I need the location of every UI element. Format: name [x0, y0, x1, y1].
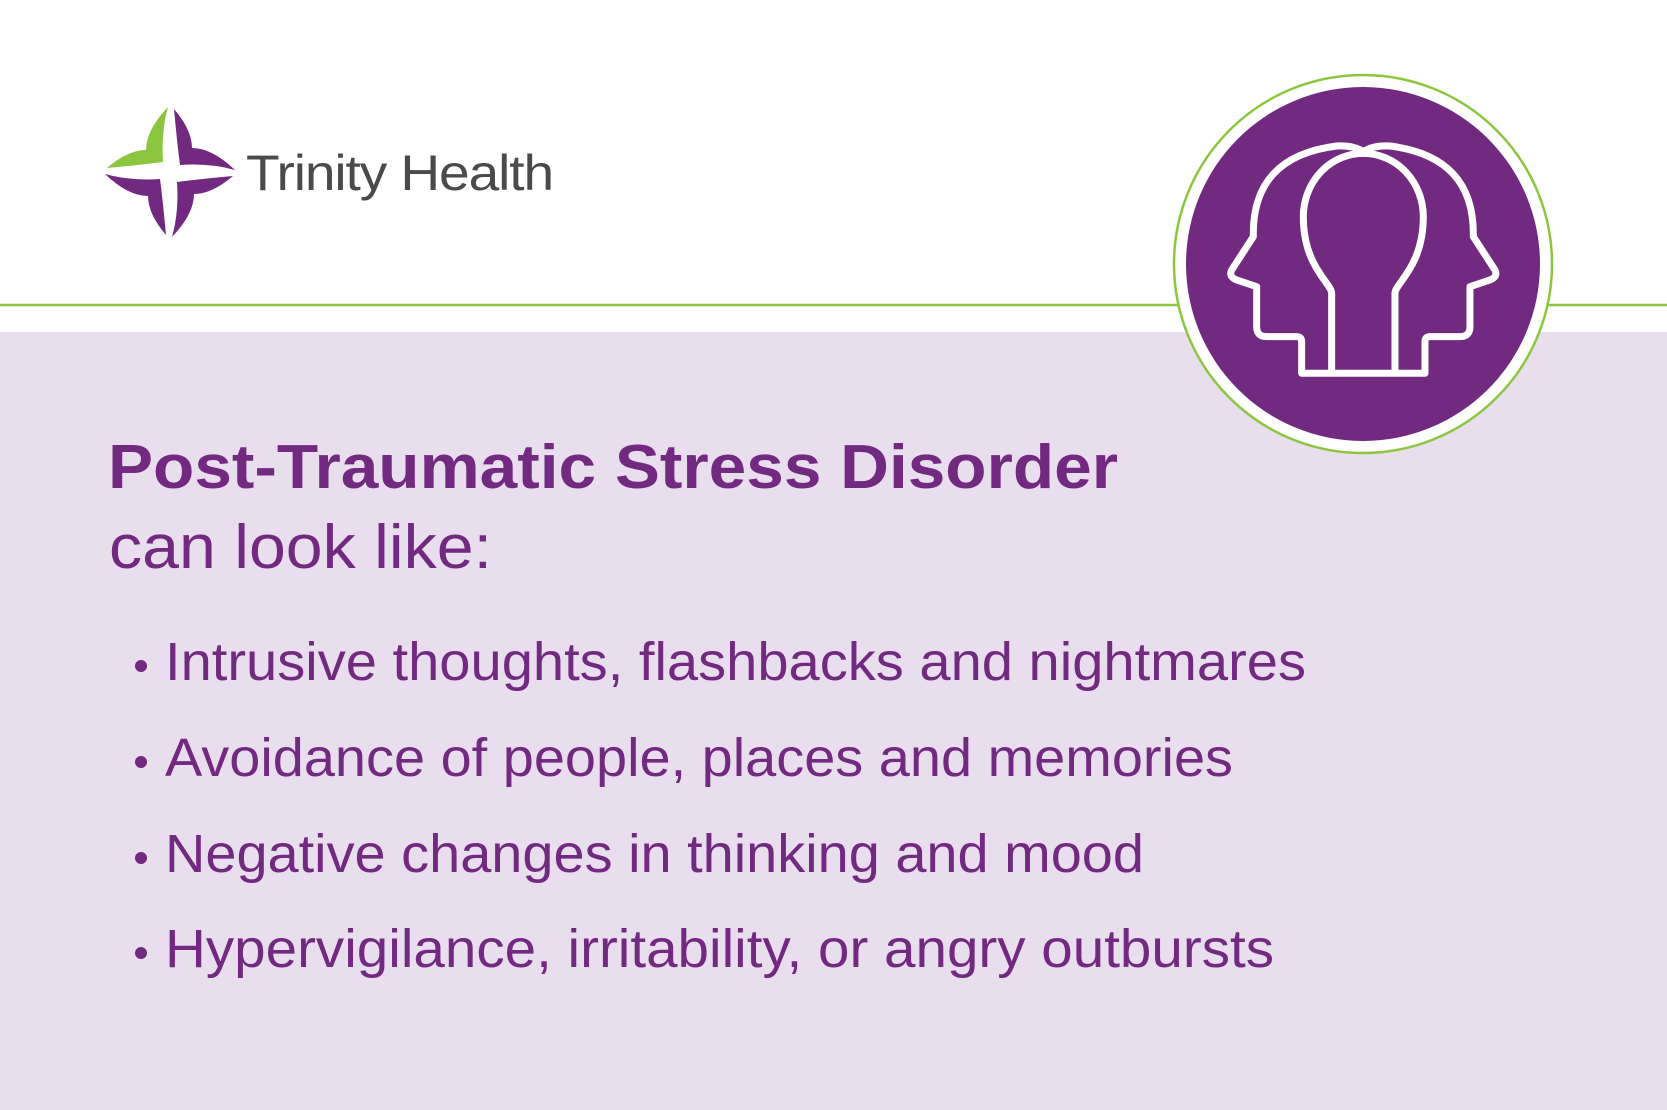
logo text: Trinity Health [246, 145, 553, 201]
logo: Trinity Health [105, 107, 553, 237]
bullet 4: Hypervigilance, irritability, or angry outbursts [165, 919, 1274, 979]
icon: two heads in purple circle [1174, 75, 1552, 453]
subtitle: can look like: [109, 513, 492, 582]
icon: cross logo [105, 107, 235, 237]
bullet 3: Negative changes in thinking and mood [165, 824, 1144, 884]
bullet list [135, 632, 1306, 979]
bullet 2: Avoidance of people, places and memories [165, 728, 1233, 788]
bullet 1: Intrusive thoughts, flashbacks and nightmares [165, 632, 1306, 692]
title: Post-Traumatic Stress Disorder [108, 433, 1118, 502]
